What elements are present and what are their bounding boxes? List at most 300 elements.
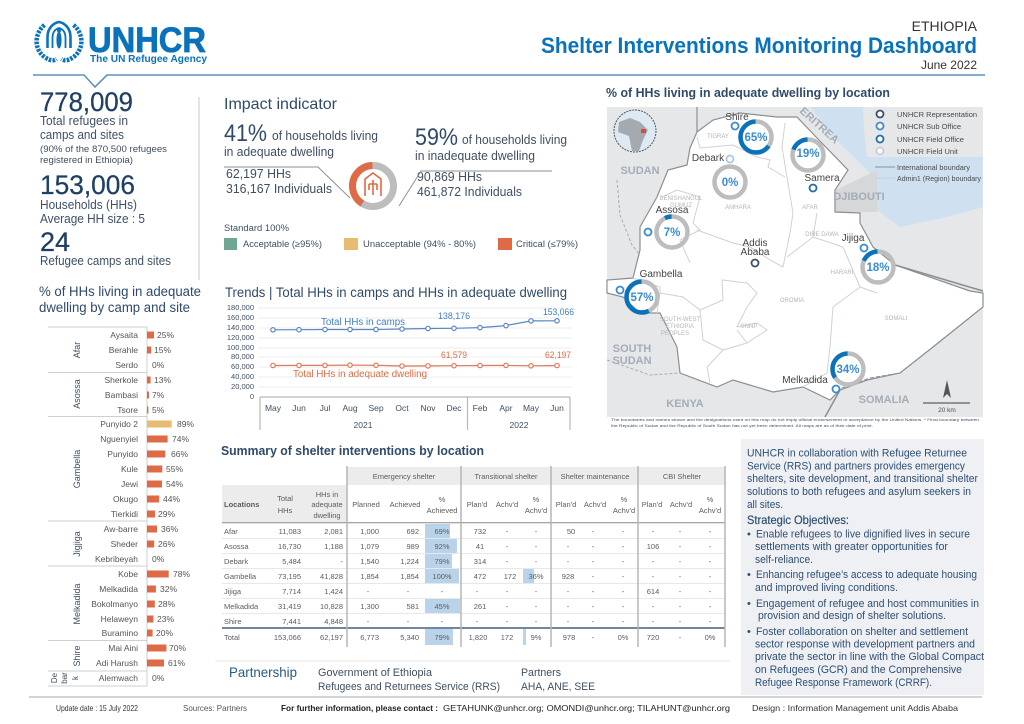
strategic objectives: provision and design of shelter solutions. (758, 610, 946, 622)
site labels: Jewi (121, 479, 138, 489)
row: Debark: - (340, 557, 344, 566)
group labels: De (50, 672, 59, 683)
region labels: SOUTH-WEST (660, 317, 700, 323)
refugees total: 778,009 (40, 87, 133, 117)
group labels: Gambella (72, 450, 82, 488)
donut: Shire 65% (740, 122, 772, 152)
scale bar and north arrow (923, 380, 970, 414)
axis and group lines (48, 327, 147, 686)
bars (147, 332, 172, 666)
row: Melkadida: - (709, 602, 712, 611)
map legend (875, 110, 981, 183)
row: Afar: - (592, 527, 595, 536)
group labels: Asossa (72, 379, 82, 409)
row: Asossa: - (709, 542, 712, 551)
row: Afar: 692 (406, 527, 419, 536)
site labels: Kule (121, 464, 138, 474)
key figures: Refugee camps and sites (40, 254, 171, 268)
place labels: Samera (804, 173, 840, 184)
partnership heading: Partnership (229, 664, 297, 680)
row: Gambella: 36% (528, 572, 544, 581)
region labels: DIRE DAWA (805, 232, 839, 238)
map disclaimer (611, 417, 979, 428)
row: Debark: 314 (474, 557, 486, 566)
group labels: bar (60, 672, 69, 684)
donut: Melkadida 34%: 34% (836, 364, 860, 376)
row: Asossa: - (622, 542, 625, 551)
row: Shire: - (535, 617, 538, 626)
dashboard title: Shelter Interventions Monitoring Dashboard (541, 33, 977, 58)
bar values: 32% (160, 584, 177, 594)
group headers: Shelter maintenance (561, 472, 629, 481)
x axis: Nov (420, 403, 436, 413)
row: Afar: - (622, 527, 625, 536)
country labels (612, 105, 909, 410)
row: Afar: 2,081 (324, 527, 343, 536)
panel: camp and site bar chart (39, 284, 201, 686)
x axis: Jun (550, 403, 564, 413)
x axis: May (523, 403, 540, 413)
region labels: AMHARA (725, 205, 751, 211)
panel: partnership: AHA, ANE, SEE (521, 681, 595, 693)
donut: Assosa 7% (656, 216, 688, 248)
place labels: Shire (725, 112, 749, 123)
donut: Gambella 57% (626, 282, 658, 312)
bar values: 55% (166, 464, 183, 474)
site labels: Alemwach (99, 673, 138, 683)
strategic objectives: Foster collaboration on shelter and settlement (756, 626, 968, 638)
row: Gambella: 1,854 (360, 572, 379, 581)
group labels: k (71, 675, 80, 680)
row: Shire: 7,441 (282, 617, 301, 626)
legend: Critical (≤79%) (516, 239, 578, 249)
row: Debark: 1,540 (360, 557, 379, 566)
icon: wreath and sheltering hands (37, 22, 81, 60)
column headers: Locations (224, 500, 259, 509)
x axis: Aug (342, 403, 358, 413)
donut: Melkadida 34% (832, 354, 864, 384)
row: Asossa: 106 (647, 542, 659, 551)
intro paragraph (747, 448, 978, 511)
heading: Summary of shelter interventions by location (221, 443, 484, 458)
site labels: Bokolmanyo (91, 599, 138, 609)
row: Asossa: Asossa (224, 542, 249, 551)
admin boundaries (633, 123, 877, 387)
bar values: 61% (168, 658, 185, 668)
row: Debark: - (535, 557, 538, 566)
country labels: SOUTH (613, 343, 651, 355)
row: Gambella: 41,828 (320, 572, 343, 581)
site labels: Kebribeyah (95, 554, 138, 564)
line: HHs in adequate dwelling (271, 363, 559, 368)
line: total HHs in camps (271, 319, 559, 332)
series and data labels: 138,176 (438, 311, 470, 321)
x axis (260, 397, 570, 430)
row: Jijiga: - (709, 587, 712, 596)
column headers: Achv'd (670, 500, 692, 509)
strategic objectives: Refugee Response Framework (CRRF). (755, 677, 932, 689)
y axis labels: 80,000 (231, 352, 254, 361)
heading: Trends | Total HHs in camps and HHs in adequate dwelling (225, 285, 567, 300)
row: Melkadida: 31,419 (278, 602, 301, 611)
y axis labels: 160,000 (227, 313, 254, 322)
group headers: Emergency shelter (373, 472, 436, 481)
row: Total: 978 (563, 633, 575, 642)
panel: summary table (221, 443, 725, 647)
map base (607, 107, 983, 417)
row: Debark: 1,224 (400, 557, 419, 566)
intro paragraph: solutions to both refugees and asylum seekers in (747, 486, 971, 498)
strategic objectives: • (747, 626, 751, 638)
group labels: Melkadida (72, 583, 82, 625)
heading: % of HHs living in adequate (39, 284, 201, 299)
legend: Standard 100% (224, 223, 289, 233)
column headers: % (621, 495, 628, 504)
implementing partners: Partners (521, 667, 561, 679)
strategic objectives: Enable refugees to live dignified lives in secure (756, 528, 970, 540)
region labels: PEOPLES (661, 331, 689, 337)
column headers: adequate (311, 500, 343, 509)
scale bar and north arrow: 20 km (938, 407, 956, 414)
row: Total: - (679, 633, 682, 642)
series and data labels: 61,579 (441, 350, 467, 360)
donut: Jijiga 18% (862, 252, 894, 282)
row: Melkadida: - (506, 602, 509, 611)
row: Shire: - (622, 617, 625, 626)
bar values: 15% (154, 345, 171, 355)
row: Gambella: - (679, 572, 682, 581)
strategic objectives: and improved living conditions. (755, 582, 898, 594)
row: Total: 0% (618, 633, 629, 642)
x axis: Feb (473, 403, 488, 413)
row: Asossa: 1,188 (324, 542, 343, 551)
strategic objectives: settlements with greater opportunities for (755, 541, 948, 553)
row: Total: - (592, 633, 595, 642)
row: Jijiga (224, 587, 712, 596)
legend: Unacceptable (94% - 80%) (363, 239, 476, 249)
column headers: Achieved (427, 506, 457, 515)
strategic objectives: Engagement of refugee and host communities in (756, 598, 979, 610)
strategic objectives: self-reliance. (755, 554, 813, 566)
region labels: ETHIOPIA (666, 324, 694, 330)
map legend: UNHCR Field Unit (897, 147, 959, 156)
header backgrounds (347, 467, 725, 485)
legend: Acceptable (≥95%) (243, 239, 322, 249)
column headers: Achieved (390, 500, 420, 509)
group labels: Shire (72, 645, 82, 667)
column headers: % (707, 495, 714, 504)
panel: map (606, 85, 983, 428)
x axis: 2021 (354, 420, 373, 430)
row: Debark: 79% (434, 557, 450, 566)
row: Asossa: - (679, 542, 682, 551)
series and data labels: 153,066 (543, 307, 574, 317)
bar values: 0% (152, 673, 165, 683)
region labels: BENISHANGUL (659, 196, 703, 202)
row: Debark: - (709, 557, 712, 566)
column headers: Achv'd (613, 506, 635, 515)
x axis: Oct (395, 403, 409, 413)
donut: Shire 65%: 65% (744, 132, 768, 144)
row: Asossa: 41 (476, 542, 484, 551)
row: Melkadida: Melkadida (224, 602, 259, 611)
row: Gambella: Gambella (224, 572, 257, 581)
y axis labels: 0 (250, 392, 254, 401)
adequate callout: in adequate dwelling (224, 145, 334, 159)
bar values: 23% (157, 614, 174, 624)
camps: 24 (40, 227, 70, 257)
row: Jijiga: - (441, 587, 444, 596)
panel: camp and site bar chart: dwelling by camp and site (39, 300, 190, 315)
column headers: HHs in (316, 490, 338, 499)
adequate callout: 62,197 HHs (226, 167, 291, 181)
group labels: Afar (72, 342, 82, 358)
site labels: Punyido 2 (100, 419, 138, 429)
map legend: UNHCR Sub Office (897, 122, 961, 131)
row: Shire: Shire (224, 617, 242, 626)
key figures (40, 87, 171, 268)
region labels: HARARI (831, 270, 854, 276)
row: Afar: 50 (567, 527, 575, 536)
place labels: Melkadida (782, 375, 828, 386)
row: Afar: 1,000 (360, 527, 379, 536)
place labels: Debark (692, 153, 725, 164)
site labels: Kobe (118, 569, 138, 579)
x axis: Dec (446, 403, 462, 413)
row: Shire: - (506, 617, 509, 626)
row: Afar: Afar (224, 527, 238, 536)
row: Afar: 732 (474, 527, 486, 536)
x axis: Jun (292, 403, 306, 413)
row: Asossa: 989 (406, 542, 419, 551)
column headers: Plan'd (642, 500, 662, 509)
row: Gambella: - (622, 572, 625, 581)
row: Afar: - (679, 527, 682, 536)
site labels (91, 330, 138, 683)
site labels: Punyido (107, 449, 138, 459)
office markers (616, 122, 868, 392)
row: Asossa: - (535, 542, 538, 551)
place labels: Gambella (640, 269, 683, 280)
row: Total: 5,340 (400, 633, 419, 642)
bar values: 0% (152, 360, 165, 370)
group labels: Jigjiga (72, 531, 82, 557)
row: Total: 62,197 (320, 633, 343, 642)
title block (541, 18, 978, 72)
row: Jijiga: - (506, 587, 509, 596)
row: Debark: - (652, 557, 655, 566)
row: Afar (224, 527, 712, 536)
row: Total: 153,066 (274, 633, 301, 642)
row: Afar: 11,083 (279, 527, 301, 536)
map legend: UNHCR Field Office (897, 135, 964, 144)
grid (258, 308, 572, 387)
group headers (373, 472, 702, 481)
row: Jijiga: - (592, 587, 595, 596)
header rule with notch (33, 75, 985, 87)
row: Melkadida: 1,300 (360, 602, 379, 611)
footer (56, 703, 958, 713)
row: Melkadida: - (535, 602, 538, 611)
row: Melkadida: 261 (474, 602, 486, 611)
site labels: Sheder (111, 539, 138, 549)
place labels: Addis (742, 238, 768, 249)
strategic objectives: Enhancing refugee’s access to adequate housing (756, 569, 977, 581)
donut: Assosa 7%: 7% (664, 227, 680, 239)
row: Debark: - (592, 557, 595, 566)
region labels: SOMALI (885, 316, 908, 322)
site labels: Serdo (115, 360, 138, 370)
row: Gambella: 172 (504, 572, 516, 581)
map legend: Admin1 (Region) boundary (897, 174, 981, 183)
row: Jijiga: - (535, 587, 538, 596)
bar values (152, 330, 194, 683)
date: June 2022 (921, 58, 977, 72)
row: Gambella (224, 572, 712, 581)
row: Afar: - (506, 527, 509, 536)
site labels: Helaweyn (101, 614, 138, 624)
row: Jijiga: 7,714 (282, 587, 301, 596)
row: Jijiga: - (476, 587, 479, 596)
row: Gambella: 73,195 (278, 572, 301, 581)
donut: Debark 0% (714, 166, 746, 198)
heading: % of HHs living in adequate dwelling by location (606, 85, 890, 100)
y axis labels: 60,000 (231, 362, 254, 371)
site labels: Buramino (102, 628, 138, 638)
column headers: Plan'd (467, 500, 487, 509)
panel: partnership: Refugees and Returnees Service (RRS) (318, 681, 500, 693)
country labels: KENYA (666, 398, 704, 410)
row: Asossa: 92% (434, 542, 450, 551)
key figures: camps and sites (40, 128, 124, 142)
country labels: SUDAN (612, 355, 652, 367)
row: Asossa: 16,730 (278, 542, 301, 551)
place labels (640, 112, 865, 386)
bar values: 7% (152, 390, 165, 400)
bar values: 25% (157, 330, 174, 340)
bar values: 5% (152, 405, 165, 415)
key figures: (90% of the 870,500 refugees (40, 144, 168, 154)
donut: Debark 0%: 0% (722, 177, 738, 189)
strategic objectives: • (747, 569, 751, 581)
row: Melkadida: - (567, 602, 570, 611)
region labels: SNNP (741, 324, 757, 330)
site labels: Adi Harush (96, 658, 138, 668)
y axis labels: 120,000 (227, 333, 254, 342)
row: Melkadida: 10,828 (320, 602, 343, 611)
site labels: Aysaita (110, 330, 138, 340)
design credit: Design : Information Management unit Addis Ababa (752, 703, 958, 713)
row: Melkadida (224, 602, 712, 611)
inadequate callout: 59% (415, 124, 458, 151)
row: Afar: 69% (434, 527, 450, 536)
row: Melkadida: - (652, 602, 655, 611)
site labels: Sherkole (104, 375, 138, 385)
site labels: Melkadida (99, 584, 138, 594)
row: Gambella: - (652, 572, 655, 581)
panel: partnership (215, 661, 730, 693)
bar values: 74% (172, 434, 189, 444)
adequate callout: 41% (224, 120, 267, 147)
strategic objectives: private the sector in line with the Global Compact (755, 651, 984, 663)
row: Total: 6,773 (360, 633, 379, 642)
intro paragraph: Service (RRS) and partners provides emergency (747, 460, 965, 472)
row: Jijiga: 614 (647, 587, 659, 596)
region labels: AFAR (802, 205, 819, 211)
government partners: Government of Ethiopia (318, 667, 433, 679)
country labels: SUDAN (620, 165, 660, 177)
row: Gambella: - (709, 572, 712, 581)
site labels: Tierkidi (111, 509, 138, 519)
table rules (222, 522, 725, 524)
inadequate callout: 461,872 Individuals (417, 185, 522, 199)
row: Gambella: 472 (474, 572, 486, 581)
contact: For further information, please contact : (281, 703, 438, 713)
row: Total (224, 633, 716, 642)
group labels (50, 342, 82, 684)
donut: Afar 19%: 19% (796, 148, 820, 160)
row: Total: 0% (705, 633, 716, 642)
row: Melkadida: - (679, 602, 682, 611)
row: Debark: - (506, 557, 509, 566)
panel: impact indicator (224, 96, 578, 250)
row: Shire: - (476, 617, 479, 626)
row: Debark: 5,484 (282, 557, 301, 566)
households: 153,006 (40, 170, 135, 200)
bar values: 54% (166, 479, 183, 489)
row: Shire: 4,848 (324, 617, 343, 626)
achievement bars (425, 524, 534, 645)
site labels: Nguenyiel (100, 434, 138, 444)
row: Jijiga: - (367, 587, 370, 596)
row: Gambella: 928 (562, 572, 574, 581)
y axis labels: 140,000 (227, 323, 254, 332)
place labels: Assosa (656, 205, 689, 216)
column headers: HHs (278, 506, 293, 515)
row: Shire: - (592, 617, 595, 626)
strategic objectives: • (747, 598, 751, 610)
row: Shire: - (652, 617, 655, 626)
intro paragraph: all sites. (747, 499, 783, 511)
row: Gambella: 1,854 (400, 572, 419, 581)
row: Total: 172 (501, 633, 513, 642)
row: Total: 1,820 (469, 633, 487, 642)
site labels: Mai Aini (108, 643, 138, 653)
column headers: Achv'd (525, 506, 547, 515)
bar values: 13% (154, 375, 171, 385)
bar values: 89% (177, 419, 194, 429)
region labels: TIGRAY (707, 134, 729, 140)
donut: Jijiga 18%: 18% (866, 262, 890, 274)
adequate callout: 316,167 Individuals (226, 182, 332, 196)
row: Jijiga: - (679, 587, 682, 596)
series and data labels: Total HHs in adequate dwelling (293, 369, 427, 380)
country labels: SOMALIA (859, 394, 909, 406)
column headers: dwelling (313, 511, 341, 520)
update date: Update date : 15 July 2022 (56, 703, 138, 713)
intro paragraph: shelters, site development, and transitional shelter (747, 473, 978, 485)
region labels: OROMIA (780, 298, 804, 304)
column headers: Achv'd (584, 500, 606, 509)
row: Total: 9% (531, 633, 542, 642)
group headers: CBI Shelter (663, 472, 702, 481)
column headers: Achv'd (699, 506, 721, 515)
wordmark: UNHCR (88, 21, 206, 60)
row: Melkadida: 581 (406, 602, 419, 611)
key figures: Average HH size : 5 (40, 212, 145, 226)
bar values: 20% (156, 628, 173, 638)
row: Debark: - (567, 557, 570, 566)
